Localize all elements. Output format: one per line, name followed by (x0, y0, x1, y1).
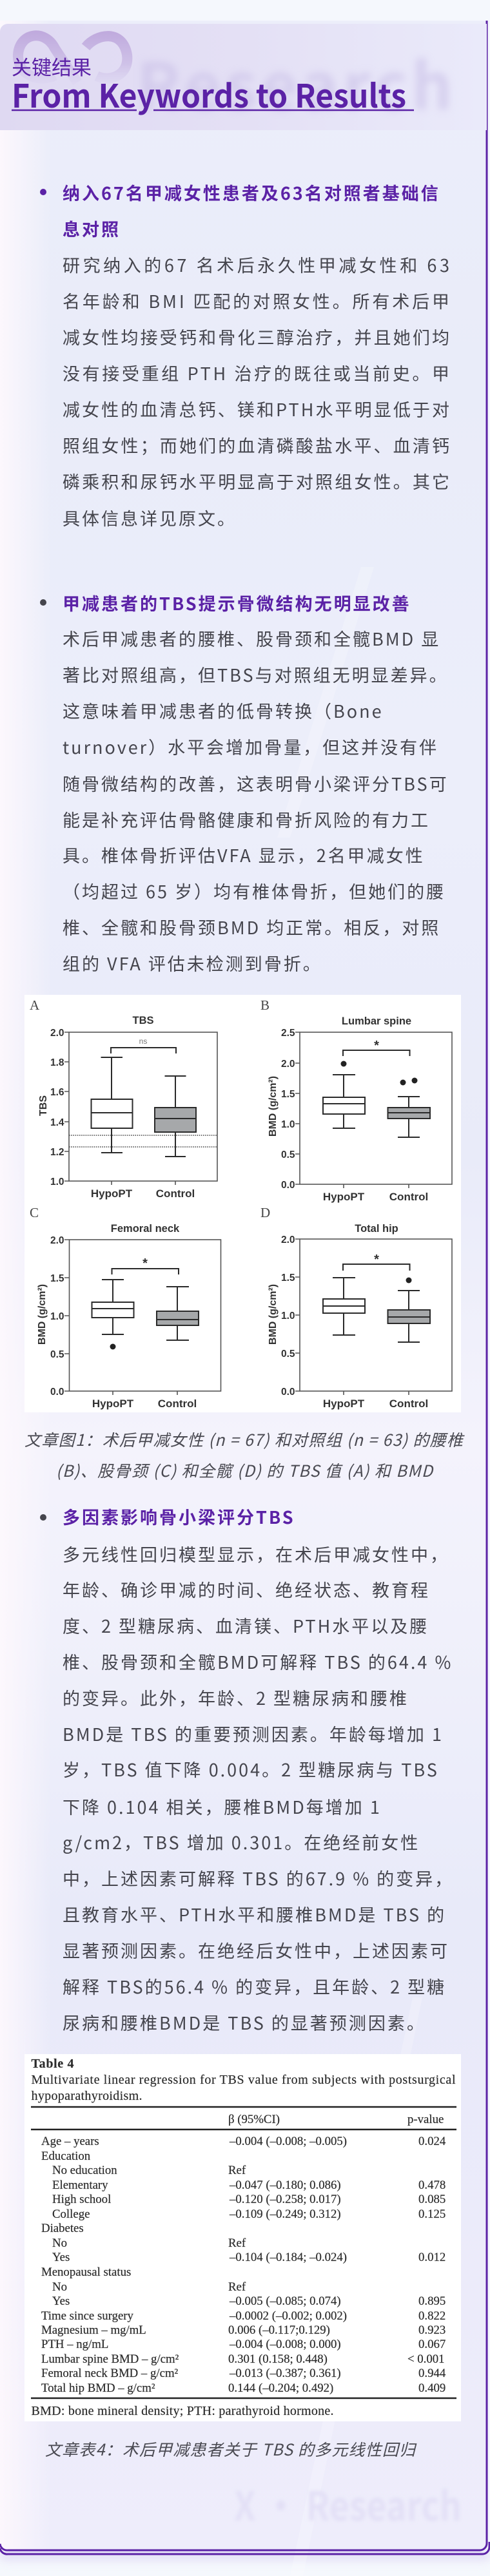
chart D: total hip: 1.5 (281, 1273, 295, 1283)
chart D: total hip: BMD (g/cm²) (268, 1284, 279, 1345)
chart B: lumbar spine: HypoPT (323, 1191, 365, 1203)
table rows: Yes (52, 2294, 70, 2308)
chart A: TBS: 1.2 (50, 1147, 64, 1158)
chart B: lumbar spine: 0.0 (281, 1180, 295, 1191)
chart A: TBS (30, 997, 217, 1200)
table rows: Total hip BMD – g/cm² (41, 2381, 155, 2395)
table rows: Yes (52, 2251, 70, 2264)
table footnote: BMD: bone mineral density; PTH: parathyroid hormone. (31, 2404, 334, 2418)
text block: 减女性均接受钙和骨化三醇治疗，并且她们均 (63, 324, 451, 349)
table rows: Lumbar spine BMD – g/cm² (41, 2352, 179, 2366)
chart A: TBS: HypoPT (91, 1187, 133, 1200)
text block: 术后甲减患者的腰椎、股骨颈和全髋BMD 显 (63, 626, 440, 651)
table rows: 0.822 (418, 2309, 446, 2323)
chart C: femoral neck: HypoPT (92, 1398, 134, 1410)
table rows: Age – years (41, 2135, 99, 2148)
chart C: femoral neck: Femoral neck (111, 1223, 180, 1235)
text block: 解释 TBS的56.4 % 的变异，且年龄、2 型糖 (63, 1974, 446, 1999)
text block: BMD是 TBS 的重要预测因素。年龄每增加 1 (63, 1721, 444, 1746)
text block: 岁，TBS 值下降 0.004。2 型糖尿病与 TBS (63, 1756, 439, 1782)
chart D: total hip: 1.0 (281, 1311, 295, 1322)
chart D: total hip: D (260, 1205, 270, 1220)
chart D: total hip (260, 1205, 452, 1410)
table rows: 0.067 (418, 2338, 446, 2351)
chart D: total hip: 0.0 (281, 1387, 295, 1398)
table rows: High school (52, 2193, 111, 2206)
table rows: Ref (228, 2236, 246, 2250)
table 4: regression (24, 2054, 461, 2421)
chart A: TBS: 2.0 (50, 1028, 64, 1039)
chart B: lumbar spine: Control (389, 1191, 428, 1203)
text block: 减女性的血清总钙、镁和PTH水平明显低于对 (63, 396, 451, 421)
table rows: 0.125 (418, 2207, 446, 2221)
text block (63, 1541, 454, 2035)
table rows: –0.109 (–0.249; 0.312) (229, 2207, 341, 2221)
table rows: 0.085 (418, 2193, 446, 2206)
chart D: total hip: Total hip (355, 1223, 398, 1235)
icon: infinity watermark logo (18, 35, 127, 82)
table title (31, 2057, 456, 2103)
table rows: –0.047 (–0.180; 0.086) (229, 2178, 341, 2192)
table rows: –0.004 (–0.008; –0.005) (229, 2135, 347, 2148)
table rows: 0.409 (418, 2381, 446, 2395)
table rows: Femoral neck BMD – g/cm² (41, 2367, 179, 2380)
table rows: Education (41, 2149, 91, 2163)
text block: 椎、全髋和股骨颈BMD 均正常。相反，对照 (63, 914, 440, 939)
text block: 没有接受重组 PTH 治疗的既往或当前史。甲 (63, 360, 451, 385)
text block: g/cm2，TBS 增加 0.301。在绝经前女性 (63, 1829, 420, 1854)
chart B: lumbar spine: BMD (g/cm²) (268, 1076, 279, 1137)
chart B: lumbar spine: 2.0 (281, 1059, 295, 1070)
text block: 度、2 型糖尿病、血清镁、PTH水平以及腰 (63, 1613, 429, 1638)
chart D: total hip: * (374, 1253, 379, 1267)
table rows: 0.923 (418, 2323, 446, 2337)
text block: 中，上述因素可解释 TBS 的67.9 % 的变异， (63, 1865, 454, 1890)
chart C: femoral neck: 1.5 (50, 1273, 64, 1284)
chart C: femoral neck: 2.0 (50, 1235, 64, 1246)
text block: 随骨微结构的改善，这表明骨小梁评分TBS可 (63, 771, 449, 796)
text block: 下降 0.104 相关，腰椎BMD每增加 1 (63, 1794, 382, 1819)
chart A: TBS: Control (156, 1187, 195, 1200)
panel: header band (0, 24, 487, 130)
table rows: College (52, 2207, 90, 2221)
text block: 尿病和腰椎BMD是 TBS 的显著预测因素。 (63, 2010, 426, 2035)
chart B: lumbar spine (260, 997, 452, 1203)
table rows: PTH – ng/mL (41, 2338, 108, 2351)
chart C: femoral neck: Control (158, 1398, 197, 1410)
table rows: 0.944 (418, 2367, 446, 2380)
chart A: TBS: ns (139, 1037, 147, 1046)
table rows: 0.006 (–0.117;0.129) (228, 2323, 330, 2337)
chart C: femoral neck: 1.0 (50, 1311, 64, 1322)
heading: 纳入67名甲减女性患者及63名对照者基础信 (63, 180, 440, 205)
chart B: lumbar spine: 0.5 (281, 1149, 295, 1160)
chart A: TBS: 1.4 (50, 1117, 64, 1128)
text block: 年龄、确诊甲减的时间、绝经状态、教育程 (63, 1577, 430, 1602)
chart D: total hip: 0.5 (281, 1349, 295, 1360)
text block: 著比对照组高，但TBS与对照组无明显差异。 (63, 662, 449, 687)
chart C: femoral neck: C (30, 1205, 39, 1220)
text block: turnover）水平会增加骨量，但这并没有伴 (63, 734, 438, 759)
chart A: TBS: A (30, 997, 40, 1013)
text block: 组的 VFA 评估未检测到骨折。 (63, 950, 322, 976)
table rows: Diabetes (41, 2222, 84, 2235)
table rows: 0.301 (0.158; 0.448) (228, 2352, 328, 2366)
table rows: No (52, 2280, 67, 2294)
chart A: TBS: 1.0 (50, 1177, 64, 1187)
table rows: Menopausal status (41, 2265, 131, 2279)
text block: 研究纳入的67 名术后永久性甲减女性和 63 (63, 252, 451, 277)
chart D: total hip: HypoPT (323, 1398, 365, 1410)
text block: 椎、股骨颈和全髋BMD可解释 TBS 的64.4 % (63, 1649, 453, 1674)
table rows: Time since surgery (41, 2309, 134, 2323)
table rows: 0.024 (418, 2135, 446, 2148)
table rows: –0.004 (–0.008; 0.000) (229, 2338, 341, 2351)
subtitle: 关键结果 (12, 52, 92, 81)
heading: 多因素影响骨小梁评分TBS (63, 1504, 295, 1529)
chart B: lumbar spine: 1.5 (281, 1089, 295, 1100)
chart C: femoral neck: 0.5 (50, 1349, 64, 1360)
chart A: TBS: 1.8 (50, 1057, 64, 1068)
title: From Keywords to Results (12, 71, 406, 117)
text block: （均超过 65 岁）均有椎体骨折，但她们的腰 (63, 878, 446, 903)
heading: 甲减患者的TBS提示骨微结构无明显改善 (63, 590, 411, 615)
table rows: β (95%CI) (228, 2113, 280, 2126)
chart A: TBS: 1.6 (50, 1087, 64, 1098)
text block (63, 626, 449, 976)
chart C: femoral neck: 0.0 (50, 1387, 64, 1398)
heading (63, 180, 440, 241)
text block: 能是补充评估骨骼健康和骨折风险的有力工 (63, 807, 430, 832)
chart B: lumbar spine: B (260, 997, 270, 1013)
table rows: Ref (228, 2164, 246, 2177)
table rows: –0.104 (–0.184; –0.024) (229, 2251, 347, 2264)
table title: Multivariate linear regression for TBS value from subjects with postsurgical (31, 2073, 456, 2087)
watermark: X Research: X · Research (234, 2474, 462, 2532)
chart D: total hip: Control (389, 1398, 428, 1410)
chart A: TBS: TBS (38, 1095, 49, 1116)
table rows: –0.005 (–0.085; 0.074) (229, 2294, 341, 2308)
section 3: multifactor (40, 1504, 454, 2035)
heading: 息对照 (63, 216, 121, 241)
chart B: lumbar spine: * (374, 1039, 379, 1053)
text block: 且教育水平、PTH水平和腰椎BMD是 TBS 的 (63, 1901, 446, 1927)
section 1: baseline info (40, 180, 451, 530)
chart C: femoral neck: BMD (g/cm²) (37, 1284, 48, 1345)
table rows: –0.013 (–0.387; 0.361) (229, 2367, 341, 2380)
table title: Table 4 (31, 2057, 74, 2071)
table title: hypoparathyroidism. (31, 2089, 142, 2103)
text block: 显著预测因素。在绝经后女性中，上述因素可 (63, 1937, 449, 1963)
text block (63, 252, 451, 530)
table rows: Elementary (52, 2178, 108, 2192)
table rows: 0.144 (–0.204; 0.492) (228, 2381, 333, 2395)
chart C: femoral neck (30, 1205, 220, 1410)
figure caption: (B)、股骨颈 (C) 和全髋 (D) 的 TBS 值 (A) 和 BMD (56, 1459, 435, 1482)
table rows: No education (52, 2164, 117, 2177)
text block: 照组女性；而她们的血清磷酸盐水平、血清钙 (63, 432, 451, 457)
table rows: Ref (228, 2280, 246, 2294)
icon: bullet (40, 599, 46, 606)
text block: 磷乘积和尿钙水平明显高于对照组女性。其它 (63, 468, 451, 494)
table rows: < 0.001 (407, 2352, 445, 2366)
chart B: lumbar spine: Lumbar spine (342, 1015, 411, 1027)
text block: 的变异。此外，年龄、2 型糖尿病和腰椎 (63, 1685, 409, 1710)
chart D: total hip: 2.0 (281, 1235, 295, 1245)
table rows: 0.478 (418, 2178, 446, 2192)
table rows: –0.0002 (–0.002; 0.002) (229, 2309, 347, 2323)
text block: 具。椎体骨折评估VFA 显示，2名甲减女性 (63, 842, 425, 867)
table caption: 文章表4：术后甲减患者关于 TBS 的多元线性回归 (45, 2437, 417, 2461)
table rows: Magnesium – mg/mL (41, 2323, 146, 2337)
table rows (41, 2113, 446, 2395)
text block: 具体信息详见原文。 (63, 505, 237, 530)
figure: box plots (24, 995, 461, 1412)
icon: bullet (40, 189, 46, 195)
section 2: TBS (40, 590, 449, 976)
table rows: No (52, 2236, 67, 2250)
text block: 这意味着甲减患者的低骨转换（Bone (63, 698, 384, 723)
table rows: –0.120 (–0.258; 0.017) (229, 2193, 341, 2206)
icon: bullet (40, 1514, 46, 1521)
table rows: 0.012 (418, 2251, 446, 2264)
table rows: 0.895 (418, 2294, 446, 2308)
chart A: TBS: TBS (133, 1015, 153, 1026)
text block: 名年龄和 BMI 匹配的对照女性。所有术后甲 (63, 288, 451, 313)
figure caption: 文章图1：术后甲减女性 (n = 67) 和对照组 (n = 63) 的腰椎 (24, 1428, 465, 1451)
chart B: lumbar spine: 2.5 (281, 1028, 295, 1039)
figure caption (24, 1428, 465, 1482)
table rows: p-value (407, 2113, 444, 2126)
chart B: lumbar spine: 1.0 (281, 1119, 295, 1130)
text block: 多元线性回归模型显示，在术后甲减女性中， (63, 1541, 449, 1566)
watermark: blurred Research: Research (137, 35, 453, 128)
chart C: femoral neck: * (142, 1256, 148, 1271)
